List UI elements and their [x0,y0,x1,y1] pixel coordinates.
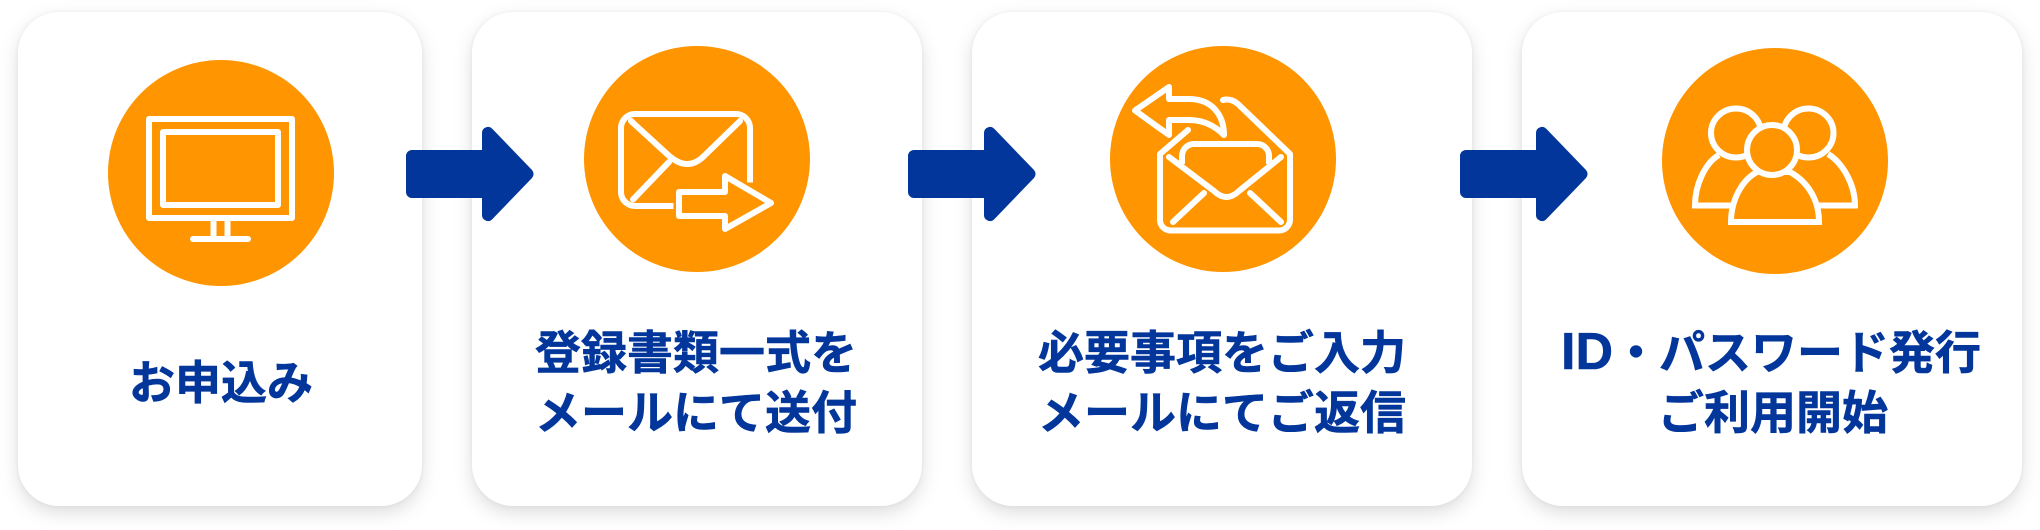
card background [1522,12,2022,506]
panel: step 1 application [18,12,422,506]
panel: step 2 send documents: メールにて送付 [535,387,857,439]
step 2 label: 登録書類一式を [535,327,857,379]
panel: step 4 start using [1522,12,2022,506]
step 4 label: ID・パスワード発行 [1561,323,1981,381]
icon: envelope with send arrow [621,114,771,229]
icon: three people [1695,108,1855,222]
icon disc [108,60,334,286]
icon disc [584,46,810,272]
panel: step 4 start using: ご利用開始 [1658,387,1888,439]
panel: step 3 enter details [972,12,1472,506]
icon disc [1662,48,1888,274]
card background [18,12,422,506]
arrow: step 1 to step 2 [406,127,534,221]
icon disc [1110,46,1336,272]
arrow: step 3 to step 4 [1460,127,1588,221]
arrow: step 2 to step 3 [908,127,1036,221]
card background [972,12,1472,506]
icon: open envelope with reply arrow [1135,87,1290,230]
card background [472,12,922,506]
step 3 label: 必要事項をご入力 [1038,327,1406,379]
panel: step 3 enter details: メールにてご返信 [1038,387,1406,439]
icon: computer monitor [149,119,292,239]
step 1 label: お申込み [129,357,313,409]
panel: step 2 send documents [472,12,922,506]
